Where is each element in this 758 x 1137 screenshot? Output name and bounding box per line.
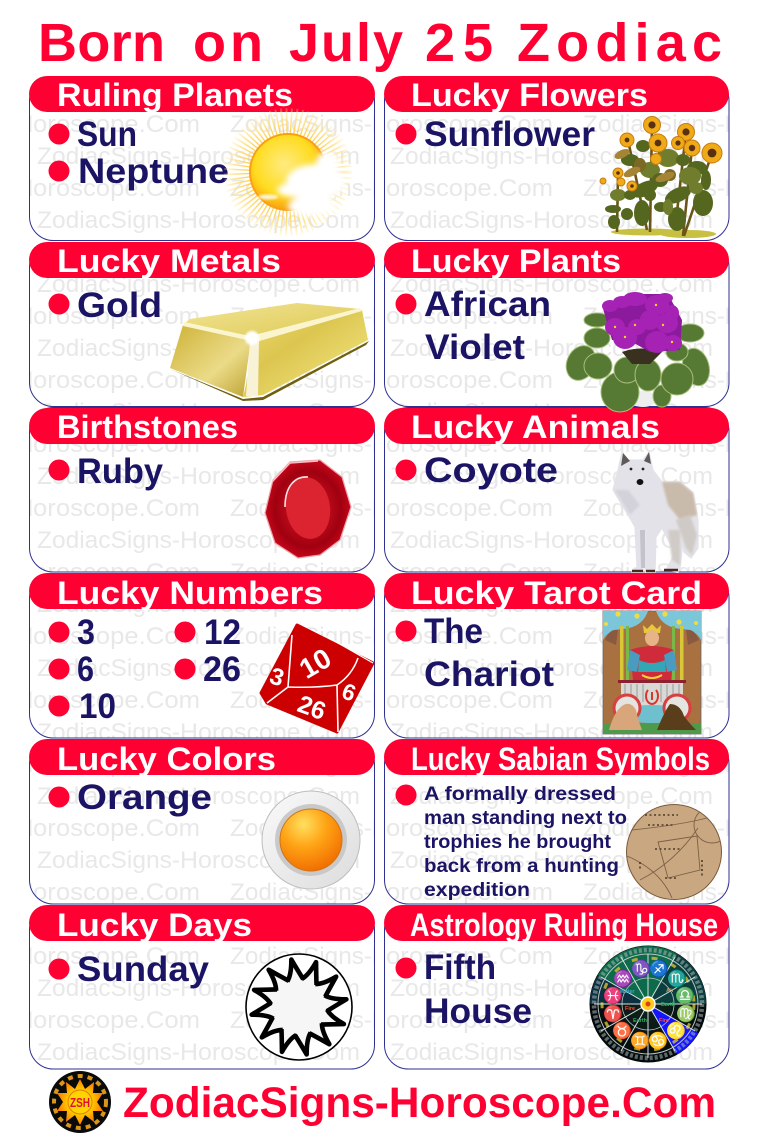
numbers list: 12	[204, 613, 241, 652]
icon: sun emblem	[245, 953, 353, 1061]
icon: white wolf	[613, 452, 698, 572]
numbers list	[48, 613, 241, 726]
heading: lucky tarot card: Lucky Tarot Card	[411, 575, 702, 611]
icon: astrology wheel: Water	[619, 989, 635, 995]
icon: astrology wheel: ♏	[667, 969, 687, 988]
bullet: african violet	[396, 285, 551, 367]
bullet: sabian symbol description: expedition	[424, 879, 530, 901]
icon: astrology wheel: Fire	[625, 1006, 635, 1012]
footer website text: ZodiacSigns-Horoscope.Com	[123, 1079, 716, 1127]
icon: orange button	[262, 791, 360, 889]
bullet: fifth house: House	[424, 992, 532, 1031]
bullet: sun: Sun	[77, 115, 137, 154]
bullet: the chariot: Chariot	[424, 655, 554, 694]
icon: astrology wheel: ♊	[630, 1031, 650, 1050]
title: July	[289, 13, 403, 73]
heading: lucky sabian symbols: Lucky Sabian Symbols	[411, 741, 710, 777]
icon: astrology wheel: Fire	[659, 1018, 669, 1024]
icon: astrology wheel: ♓	[603, 986, 623, 1005]
icon: ten-sided die	[261, 625, 373, 732]
panel: lucky days	[29, 905, 375, 1069]
icon: ten-sided die: 26	[294, 690, 330, 726]
bullet: fifth house	[396, 948, 532, 1031]
panel: lucky plants	[384, 242, 729, 412]
bullet: the chariot	[396, 612, 554, 694]
icon: astrology wheel	[590, 946, 706, 1062]
footer logo	[49, 1071, 111, 1133]
title: on	[193, 13, 263, 73]
bullet: sabian symbol description: man standing next to	[424, 807, 627, 829]
icon: astrology wheel: ♈	[603, 1004, 623, 1023]
bullet: orange: Orange	[77, 778, 212, 817]
icon: astrology wheel: Earth	[633, 1018, 648, 1024]
icon: ten-sided die: 3	[266, 663, 287, 692]
icon: astrology wheel: ♋	[648, 1031, 668, 1050]
numbers list: 26	[203, 650, 241, 689]
bullet: sunflower: Sunflower	[424, 115, 595, 154]
title: Zodiac	[517, 13, 722, 73]
icon: african violet plant	[561, 292, 713, 412]
icon: ruby gem	[265, 460, 351, 558]
heading: lucky days: Lucky Days	[57, 907, 252, 943]
icon: astrology wheel: ♌	[666, 1021, 686, 1040]
bullet: ruby: Ruby	[77, 452, 164, 491]
heading: lucky metals: Lucky Metals	[57, 243, 281, 279]
bullet: sabian symbol description: trophies he brought	[424, 831, 612, 853]
heading: lucky flowers: Lucky Flowers	[411, 77, 648, 113]
panel: astrology ruling house	[384, 905, 729, 1069]
icon: astrology wheel: ♍	[676, 1004, 696, 1023]
panel: lucky flowers	[384, 76, 729, 240]
bullet: sun	[48, 115, 137, 154]
icon: astrology wheel: Earth	[661, 1002, 676, 1008]
panel: ruling planets	[29, 76, 375, 240]
bullet: african violet: Violet	[425, 328, 525, 367]
icon: astrology wheel: ♎	[675, 986, 695, 1005]
icon: chariot tarot card	[603, 611, 701, 734]
footer logo: ZSH	[70, 1095, 90, 1110]
panel: birthstones	[29, 408, 375, 572]
heading: birthstones: Birthstones	[57, 409, 238, 445]
numbers list: 10	[79, 687, 116, 726]
panel: lucky sabian symbols	[384, 739, 730, 904]
title: Born	[38, 13, 165, 73]
bullet: sabian symbol description: back from a hunting	[424, 855, 619, 877]
bullet: the chariot: The	[424, 612, 483, 651]
heading: lucky colors: Lucky Colors	[57, 741, 276, 777]
numbers list: 3	[77, 613, 95, 652]
bullet: coyote: Coyote	[424, 451, 558, 490]
numbers list: 6	[77, 650, 94, 689]
icon: astrology wheel: ♒	[613, 969, 633, 988]
panel: lucky animals	[384, 408, 729, 572]
title: 25	[425, 13, 493, 73]
panel: lucky colors	[29, 739, 375, 904]
bullet: sabian symbol description: A formally dressed	[424, 783, 616, 805]
icon: ten-sided die: 10	[294, 642, 336, 685]
bullet: fifth house: Fifth	[424, 948, 496, 987]
heading: lucky numbers: Lucky Numbers	[57, 575, 323, 611]
panel: lucky metals	[29, 242, 375, 406]
bullet: neptune: Neptune	[78, 152, 229, 191]
bullet: sunday: Sunday	[77, 950, 210, 989]
icon: parchment birth chart	[626, 804, 730, 900]
title	[38, 13, 722, 73]
icon: astrology wheel: ♉	[612, 1021, 632, 1040]
bullet: sabian symbol description	[396, 783, 627, 901]
heading: lucky animals: Lucky Animals	[411, 409, 660, 445]
bullet: african violet: African	[424, 285, 551, 324]
icon: gold bar	[170, 303, 369, 401]
icon: astrology wheel: ♐	[649, 959, 669, 978]
heading: ruling planets: Ruling Planets	[57, 77, 293, 113]
icon: ten-sided die: 6	[339, 678, 359, 706]
icon: astrology wheel: ♑	[631, 959, 651, 978]
icon: astrology wheel: Air	[666, 988, 675, 994]
icon: sunflowers	[600, 116, 722, 238]
panel: lucky tarot card	[384, 573, 729, 738]
heading: lucky plants: Lucky Plants	[411, 243, 621, 279]
bullet: gold: Gold	[77, 286, 162, 325]
panel: lucky numbers	[29, 573, 375, 738]
icon: sun with cloud	[238, 122, 346, 222]
